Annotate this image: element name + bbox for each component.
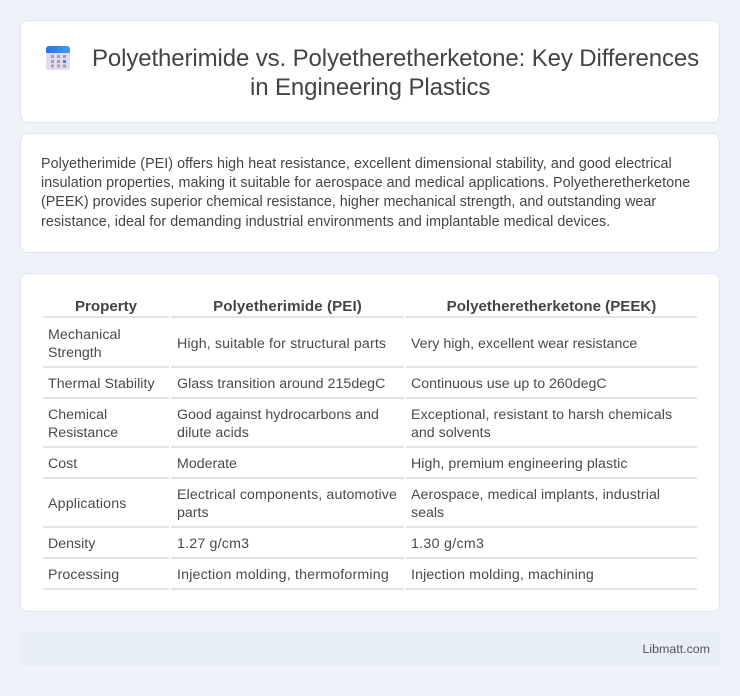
row: applications: Aerospace, medical implants, industrial [411, 487, 660, 503]
row: thermal stability: Glass transition around 215degC [177, 376, 385, 392]
intro paragraph: Polyetherimide (PEI) offers high heat resistance, excellent dimensional stability, and good electrical [41, 156, 672, 172]
intro paragraph: insulation properties, making it suitable for aerospace and medical applications. Polyetheretherketone [41, 175, 690, 191]
icon: calendar grid [46, 46, 70, 70]
row: thermal stability: Thermal Stability [48, 376, 155, 392]
row: applications: Electrical components, automotive [177, 487, 397, 503]
row: mechanical strength: Mechanical [48, 327, 121, 343]
title panel [20, 20, 720, 123]
row: density: Density [48, 536, 95, 552]
row: chemical resistance: Good against hydrocarbons and [177, 407, 379, 423]
row: processing: Processing [48, 567, 119, 583]
heading [92, 45, 699, 101]
row: chemical resistance: dilute acids [177, 425, 249, 441]
row: thermal stability: Continuous use up to 260degC [411, 376, 607, 392]
heading: Polyetherimide vs. Polyetheretherketone: Key Differences [92, 45, 699, 72]
row: processing [43, 567, 697, 590]
row: applications: parts [177, 505, 209, 521]
intro text panel [20, 133, 720, 253]
row: density: 1.27 g/cm3 [177, 536, 249, 552]
comparison table panel [20, 273, 720, 612]
row: applications [43, 487, 697, 528]
row: processing: Injection molding, thermoforming [177, 567, 389, 583]
row: thermal stability [43, 376, 697, 399]
heading: in Engineering Plastics [250, 74, 490, 101]
row: chemical resistance: Exceptional, resistant to harsh chemicals [411, 407, 672, 423]
footer bar [20, 632, 720, 666]
row: chemical resistance: and solvents [411, 425, 491, 441]
intro paragraph: resistance, ideal for demanding industrial environments and implantable medical devices. [41, 214, 610, 230]
row: mechanical strength [43, 327, 697, 368]
row: applications: seals [411, 505, 444, 521]
row: cost [43, 456, 697, 479]
table header: Property [75, 298, 137, 315]
row: mechanical strength: High, suitable for structural parts [177, 336, 386, 352]
row: chemical resistance [43, 407, 697, 448]
row: applications: Applications [48, 496, 127, 512]
table header [43, 298, 697, 318]
row: mechanical strength: Very high, excellent wear resistance [411, 336, 637, 352]
intro paragraph: (PEEK) provides superior chemical resistance, higher mechanical strength, and outstanding wear [41, 194, 656, 210]
row: cost: Cost [48, 456, 77, 472]
row: cost: Moderate [177, 456, 237, 472]
row: cost: High, premium engineering plastic [411, 456, 627, 472]
row: density: 1.30 g/cm3 [411, 536, 484, 552]
row: processing: Injection molding, machining [411, 567, 594, 583]
table header: Polyetherimide (PEI) [213, 298, 362, 315]
row: density [43, 536, 697, 559]
row: chemical resistance: Resistance [48, 425, 118, 441]
intro paragraph [41, 156, 690, 230]
row: mechanical strength: Strength [48, 345, 102, 361]
comparison table [43, 298, 697, 590]
table header: Polyetheretherketone (PEEK) [447, 298, 656, 315]
row: chemical resistance: Chemical [48, 407, 107, 423]
footer credit: Libmatt.com [643, 642, 710, 656]
